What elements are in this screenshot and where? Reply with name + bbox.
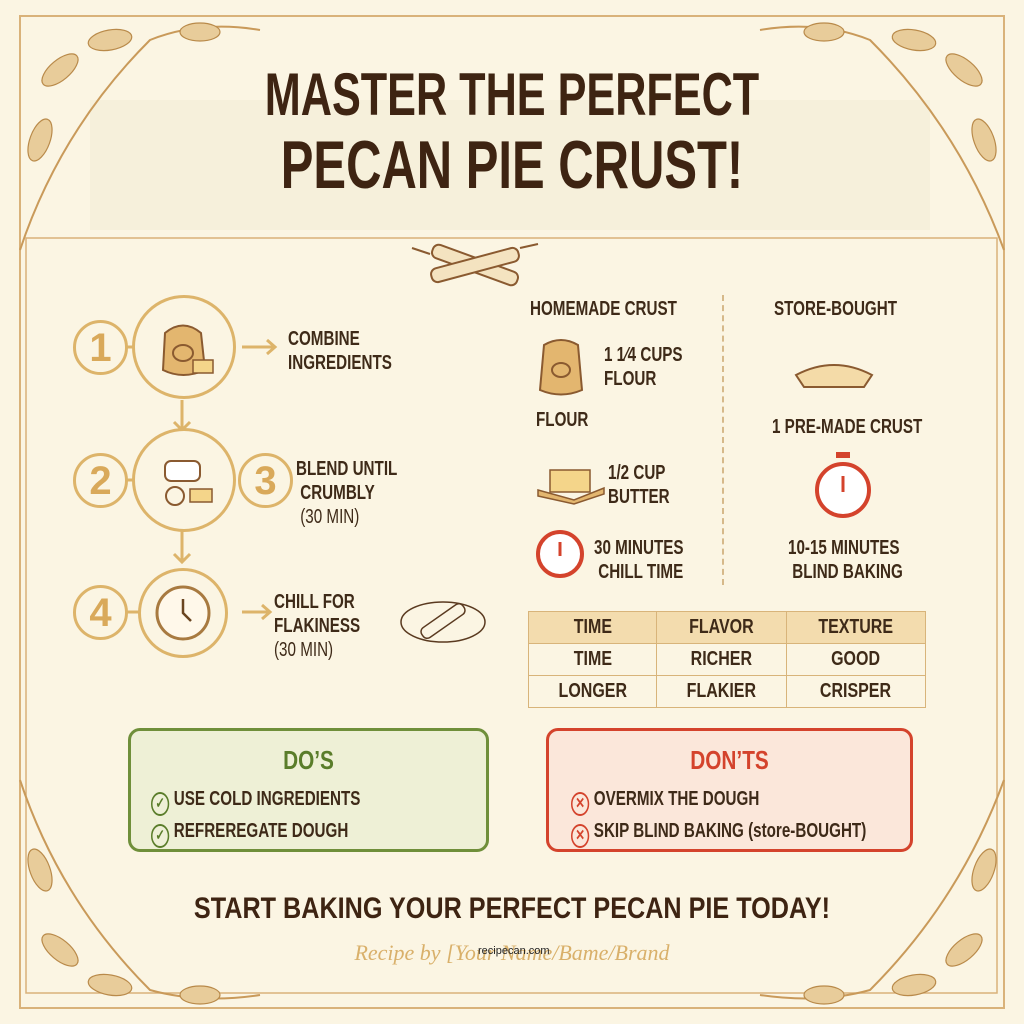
icon: pie bbox=[794, 364, 874, 388]
homemade crust: HOMEMADE CRUST bbox=[530, 298, 677, 320]
panel: don'ts: DON’TS bbox=[690, 745, 769, 775]
comparison table: RICHER bbox=[691, 648, 752, 670]
process steps: COMBINE bbox=[288, 328, 360, 350]
panel: do's: USE COLD INGREDIENTS bbox=[174, 788, 360, 810]
process steps: (30 MIN) bbox=[300, 506, 359, 528]
title bbox=[265, 61, 759, 203]
comparison table: TEXTURE bbox=[819, 616, 893, 638]
panel: do's: ✓ bbox=[155, 827, 165, 844]
process steps: (30 MIN) bbox=[274, 639, 333, 661]
step 1 bbox=[73, 320, 128, 375]
homemade crust bbox=[530, 298, 684, 583]
comparison table: GOOD bbox=[831, 648, 880, 670]
comparison table: FLAVOR bbox=[689, 616, 754, 638]
homemade crust: FLOUR bbox=[604, 368, 656, 390]
panel: don'ts bbox=[546, 728, 913, 852]
step 4 bbox=[73, 585, 128, 640]
process steps: CHILL FOR bbox=[274, 591, 355, 613]
panel: don'ts: SKIP BLIND BAKING (store-BOUGHT) bbox=[594, 820, 866, 842]
process steps: FLAKINESS bbox=[274, 615, 360, 637]
icon: timer bbox=[536, 530, 584, 578]
panel: don'ts: OVERMIX THE DOUGH bbox=[594, 788, 759, 810]
step 1: 1 bbox=[89, 326, 112, 370]
process steps: BLEND UNTIL bbox=[296, 458, 397, 480]
panel: do's bbox=[128, 728, 489, 852]
icon: stopwatch bbox=[815, 452, 871, 518]
store-bought: STORE-BOUGHT bbox=[774, 298, 897, 320]
store-bought: 1 PRE-MADE CRUST bbox=[772, 416, 922, 438]
process steps: CRUMBLY bbox=[300, 482, 375, 504]
icon: rolling pins bbox=[412, 243, 538, 286]
panel: don'ts: ✕ bbox=[575, 827, 585, 844]
comparison table: CRISPER bbox=[820, 680, 891, 702]
title: MASTER THE PERFECT bbox=[265, 61, 759, 128]
icon: butter bbox=[537, 469, 605, 505]
homemade crust: BUTTER bbox=[608, 486, 670, 508]
signature: Recipe by [Your Name/Bame/Brand bbox=[354, 940, 670, 965]
store-bought: 10-15 MINUTES bbox=[788, 537, 900, 559]
panel: don'ts: ✕ bbox=[575, 795, 585, 812]
divider bbox=[722, 295, 724, 585]
text: recipecan.com bbox=[478, 945, 550, 957]
homemade crust: FLOUR bbox=[536, 409, 588, 431]
homemade crust: 30 MINUTES bbox=[594, 537, 684, 559]
comparison table: TIME bbox=[573, 648, 612, 670]
homemade crust: 1 1⁄4 CUPS bbox=[604, 344, 683, 366]
panel: do's: REFREREGATE DOUGH bbox=[174, 820, 348, 842]
comparison table bbox=[528, 611, 926, 708]
process steps bbox=[73, 295, 486, 661]
icon: flour bbox=[538, 339, 583, 396]
footer call to action: START BAKING YOUR PERFECT PECAN PIE TODAY! bbox=[194, 892, 830, 925]
panel: do's: DO’S bbox=[283, 745, 334, 775]
comparison table: LONGER bbox=[558, 680, 627, 702]
step 4: 4 bbox=[89, 591, 112, 635]
title: PECAN PIE CRUST! bbox=[281, 127, 743, 203]
icon: rolling pin dough bbox=[400, 601, 486, 643]
step 2 & 3: 2 bbox=[89, 459, 112, 503]
homemade crust: 1/2 CUP bbox=[608, 462, 665, 484]
comparison table: TIME bbox=[573, 616, 612, 638]
store-bought bbox=[772, 298, 922, 583]
store-bought: BLIND BAKING bbox=[792, 561, 903, 583]
homemade crust: CHILL TIME bbox=[598, 561, 683, 583]
process steps: 3 bbox=[254, 459, 277, 503]
panel: do's: ✓ bbox=[155, 795, 165, 812]
process steps: INGREDIENTS bbox=[288, 352, 392, 374]
step 2 & 3 bbox=[73, 453, 128, 508]
comparison table: FLAKIER bbox=[687, 680, 756, 702]
